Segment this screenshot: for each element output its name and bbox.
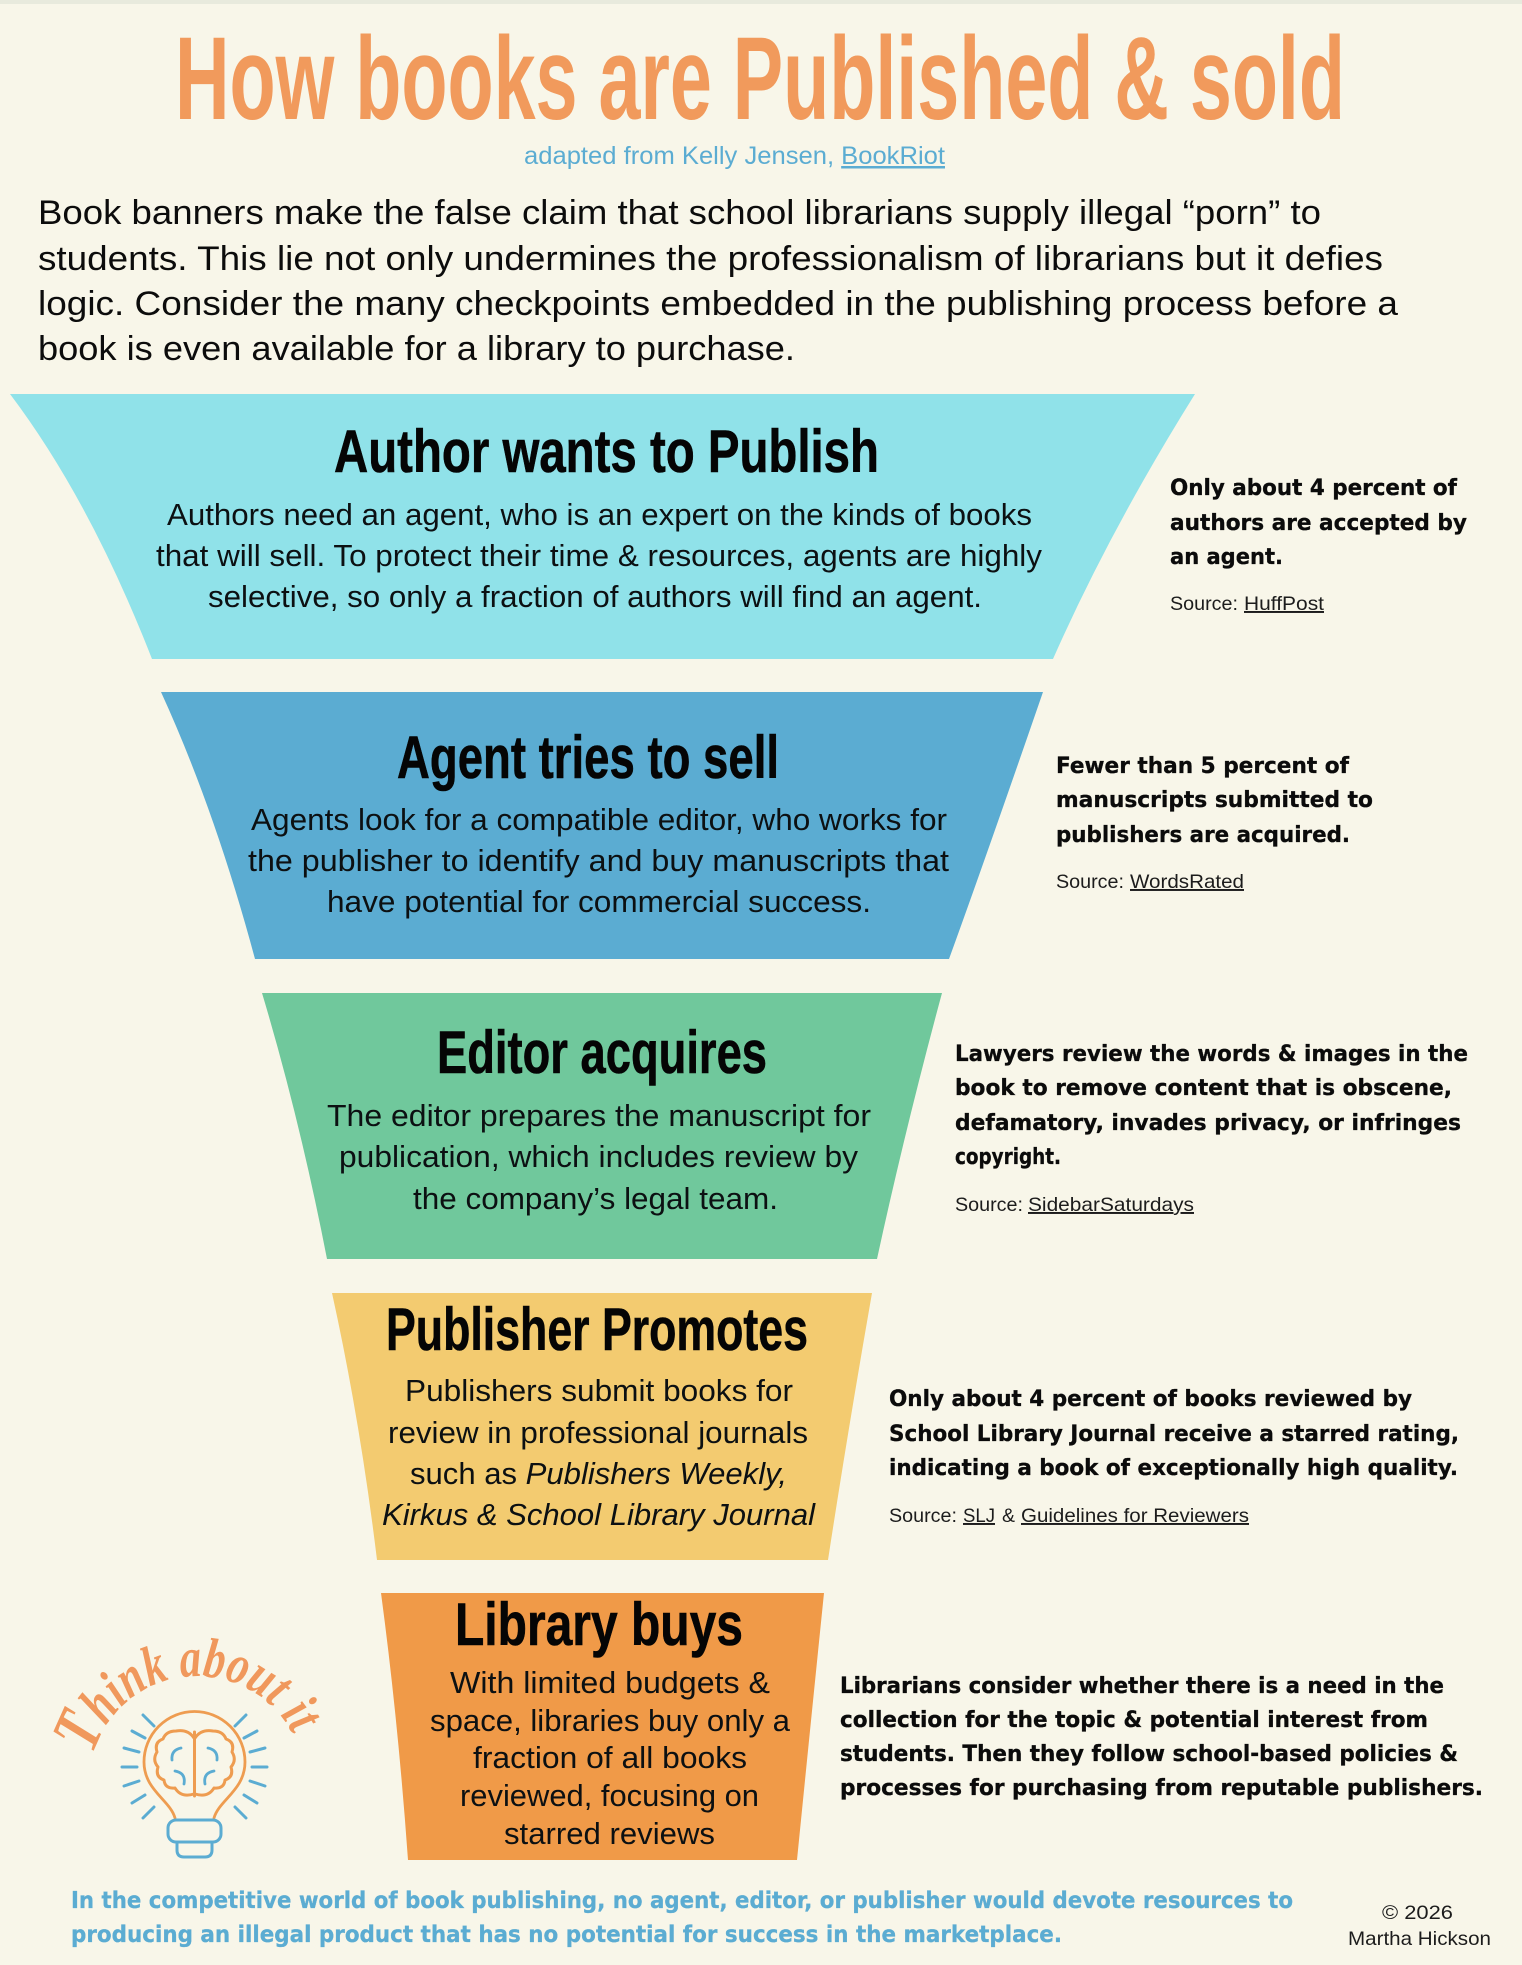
callout: publisher statistic: Source: [889, 1505, 957, 1527]
callout: author statistic: Source: [1170, 593, 1238, 615]
body: author: Authors need an agent, who is an expert on the kinds of books [167, 497, 1032, 532]
body: library [430, 1665, 791, 1851]
intro paragraph: Book banners make the false claim that school librarians supply illegal “porn” to [38, 194, 1321, 232]
panel: agent tries to sell [161, 692, 1043, 959]
callout: library statistic: processes for purchasing from reputable publishers. [840, 1776, 1483, 1801]
body: author: selective, so only a fraction of authors will find an agent. [208, 579, 982, 614]
intro paragraph: book is even available for a library to purchase. [38, 330, 795, 368]
intro paragraph: logic. Consider the many checkpoints embedded in the publishing process before a [38, 285, 1398, 323]
heading: publisher: Publisher Promotes [386, 1296, 808, 1363]
body: publisher: Kirkus & School Library Journal [382, 1497, 816, 1532]
bulb base [168, 1820, 221, 1857]
body: agent: Agents look for a compatible editor, who works for [251, 802, 947, 837]
conclusion statement [71, 1888, 1293, 1948]
copyright credit: Martha Hickson [1348, 1928, 1491, 1950]
callout: publisher statistic [889, 1387, 1459, 1527]
callout: author statistic: authors are accepted by [1170, 511, 1467, 536]
callout: agent statistic: WordsRated [1130, 871, 1244, 893]
conclusion statement: In the competitive world of book publishing, no agent, editor, or publisher would devote resources to [71, 1888, 1293, 1914]
body: editor [327, 1098, 871, 1216]
body: agent: the publisher to identify and buy manuscripts that [248, 843, 949, 878]
panel: author wants to publish [10, 394, 1195, 659]
callout: publisher statistic: indicating a book of exceptionally high quality. [889, 1456, 1458, 1481]
callout: agent statistic: Source: [1056, 871, 1124, 893]
icon: think about it lightbulb with brain [54, 1638, 320, 1858]
heading: library: Library buys [455, 1591, 743, 1658]
arched heading: think about it: Think about it [54, 1638, 320, 1751]
body: publisher: review in professional journals [388, 1415, 808, 1450]
callout: library statistic: collection for the topic & potential interest from [840, 1708, 1428, 1733]
body: editor: publication, which includes review by [339, 1139, 858, 1174]
body: publisher [382, 1373, 816, 1532]
body: author [156, 497, 1042, 614]
panel: publisher promotes [332, 1293, 872, 1560]
body: library: fraction of all books [473, 1740, 747, 1775]
body: agent [248, 802, 949, 919]
brain [155, 1731, 234, 1796]
callout: agent statistic [1056, 754, 1373, 893]
callout: editor statistic: Source: [955, 1194, 1023, 1216]
subtitle: source credit: adapted from Kelly Jensen, BookRiot [524, 142, 945, 170]
callout: publisher statistic: Only about 4 percent of books reviewed by [889, 1387, 1412, 1412]
intro paragraph [38, 194, 1398, 368]
copyright credit [1348, 1902, 1491, 1950]
callout: author statistic: Only about 4 percent of [1170, 476, 1457, 501]
callout: library statistic [840, 1674, 1483, 1801]
callout: author statistic: an agent. [1170, 545, 1283, 570]
callout: agent statistic: Fewer than 5 percent of [1056, 754, 1349, 779]
light rays [122, 1715, 267, 1818]
heading: agent: Agent tries to sell [397, 724, 779, 791]
callout: library statistic: students. Then they follow school-based policies & [840, 1742, 1458, 1767]
conclusion statement: producing an illegal product that has no potential for success in the marketplace. [71, 1922, 1062, 1948]
body: library: reviewed, focusing on [460, 1778, 759, 1813]
brain folds [172, 1748, 217, 1784]
panel: editor acquires [262, 993, 942, 1259]
body: author: that will sell. To protect their time & resources, agents are highly [156, 538, 1042, 573]
body: library: space, libraries buy only a [430, 1703, 791, 1738]
panel: library buys [381, 1591, 824, 1860]
bulb outline [144, 1712, 245, 1818]
body: editor: the company’s legal team. [413, 1181, 778, 1216]
callout: editor statistic: book to remove content that is obscene, [955, 1076, 1452, 1101]
callout: agent statistic: publishers are acquired. [1056, 823, 1350, 848]
body: library: starred reviews [504, 1816, 715, 1851]
callout: editor statistic [955, 1042, 1468, 1216]
callout: author statistic: HuffPost [1244, 593, 1325, 615]
callout: agent statistic: manuscripts submitted to [1056, 788, 1373, 813]
body: library: With limited budgets & [450, 1665, 770, 1700]
callout: editor statistic: copyright. [955, 1145, 1061, 1170]
intro paragraph: students. This lie not only undermines the professionalism of librarians but it defies [38, 240, 1383, 278]
body: publisher: Publishers submit books for [405, 1373, 793, 1408]
callout: library statistic: Librarians consider whether there is a need in the [840, 1674, 1444, 1699]
callout: publisher statistic: School Library Journal receive a starred rating, [889, 1422, 1459, 1447]
callout: publisher statistic: Guidelines for Reviewers [1021, 1505, 1249, 1527]
body: publisher: such as Publishers Weekly, [410, 1456, 787, 1491]
body: editor: The editor prepares the manuscript for [327, 1098, 871, 1133]
callout: editor statistic: defamatory, invades privacy, or infringes [955, 1111, 1461, 1136]
callout: editor statistic: SidebarSaturdays [1028, 1194, 1194, 1216]
body: agent: have potential for commercial success. [327, 884, 871, 919]
copyright credit: © 2026 [1382, 1902, 1453, 1924]
heading: editor: Editor acquires [437, 1019, 767, 1086]
callout: author statistic [1170, 476, 1467, 615]
callout: publisher statistic: & [1002, 1505, 1015, 1527]
heading: author: Author wants to Publish [334, 418, 879, 485]
callout: editor statistic: Lawyers review the words & images in the [955, 1042, 1468, 1067]
callout: publisher statistic: SLJ [963, 1505, 995, 1527]
